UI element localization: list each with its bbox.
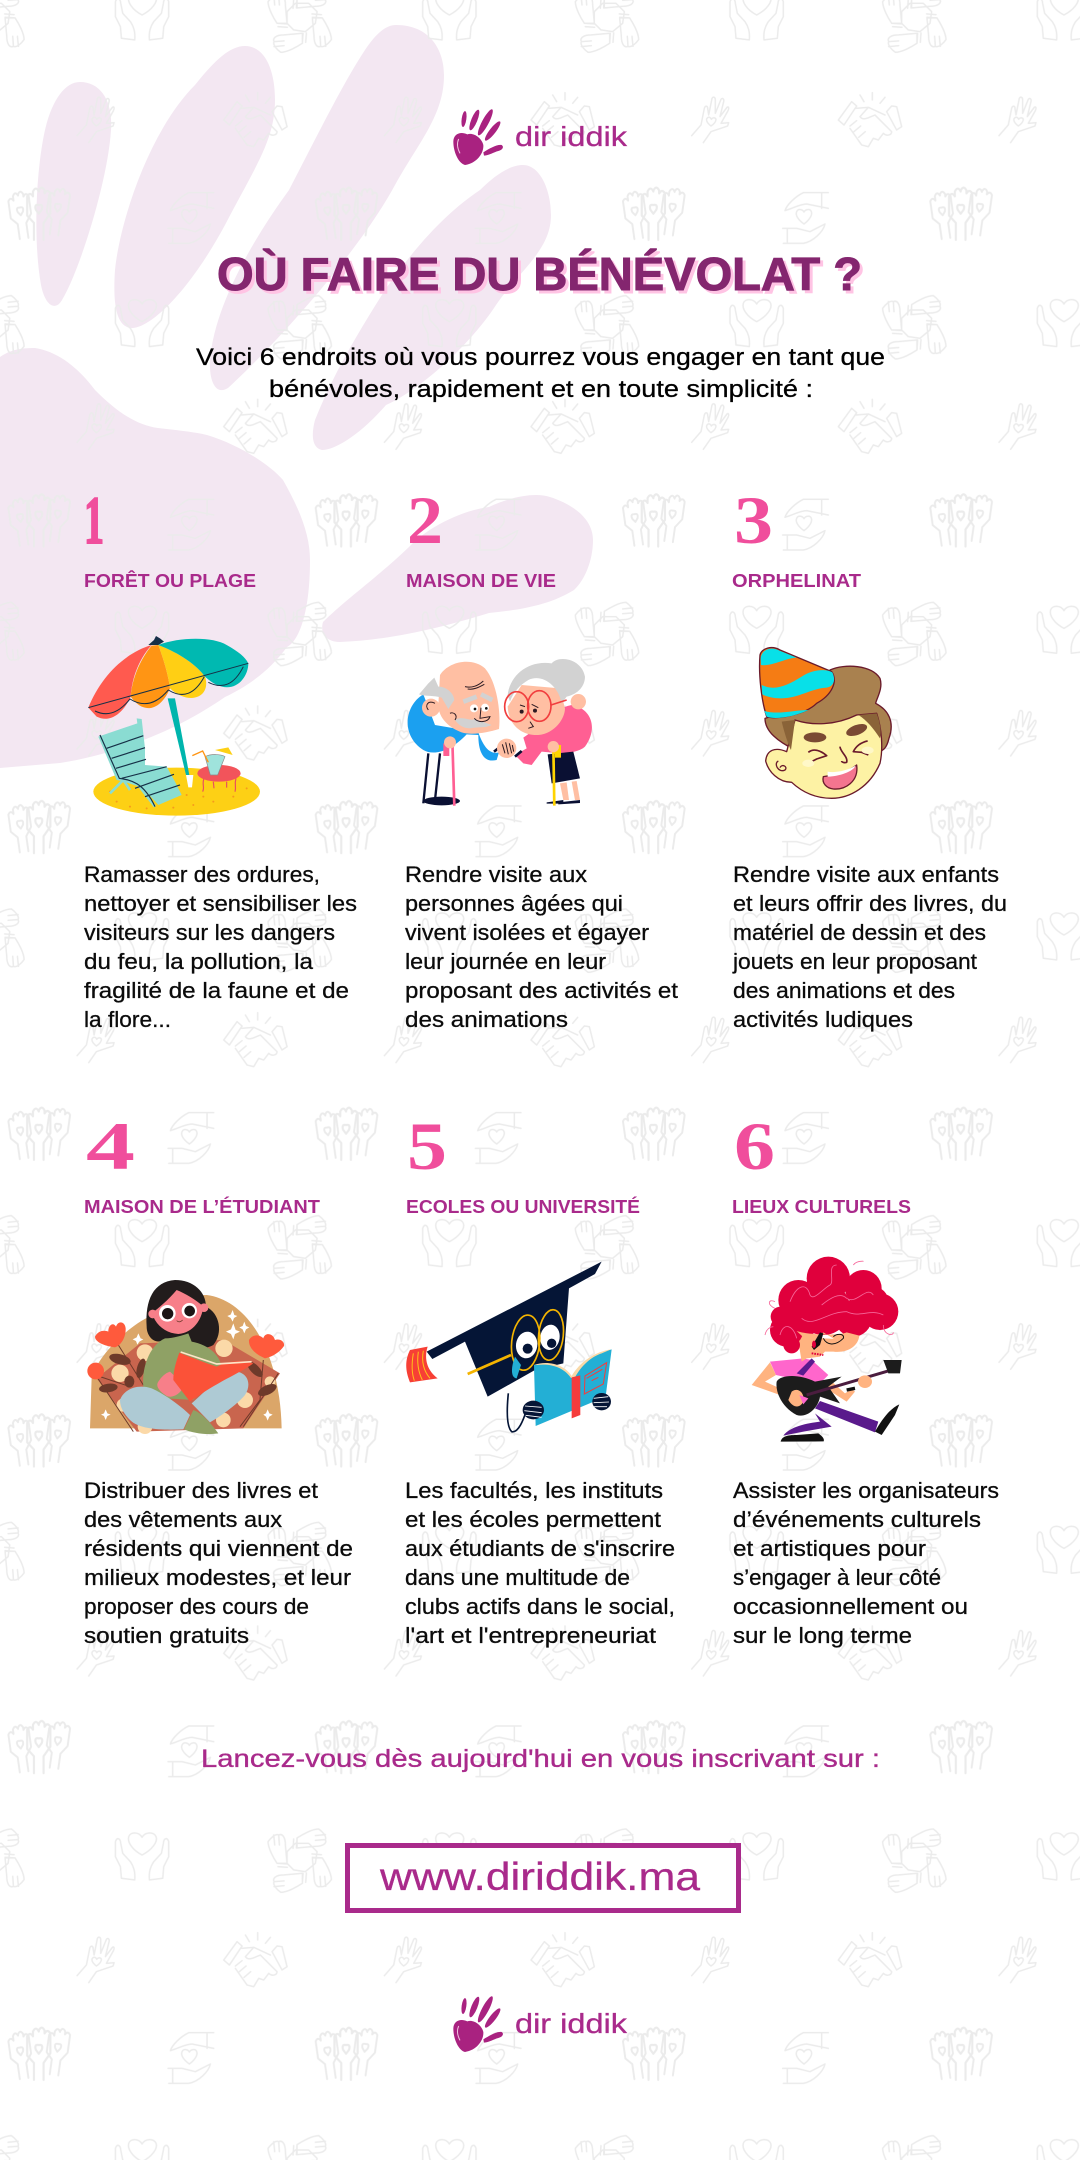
heading 5: ECOLES OU UNIVERSITÉ [406,1196,640,1217]
description 6: occasionnellement ou [733,1594,968,1619]
icon: boy with party hat [760,648,891,798]
bottom logo mark [453,1995,503,2052]
description 2 [405,862,678,1032]
description 4 [84,1478,353,1648]
heading 1: FORÊT OU PLAGE [84,570,256,591]
description 6: d’événements culturels [733,1507,981,1532]
panel: 3 orphelinat [732,482,1007,1032]
intro paragraph: Voici 6 endroits où vous pourrez vous engager en tant que [196,344,885,371]
heading 3: ORPHELINAT [732,571,861,591]
description 1: la flore... [84,1007,171,1032]
description 2: proposant des activités et [405,978,678,1003]
bottom logo wordmark: dir iddik [515,2008,628,2039]
description 1: fragilité de la faune et de [84,978,349,1003]
description 3 [732,862,1007,1032]
description 3: jouets en leur proposant [732,949,977,974]
heading 4: MAISON DE L’ÉTUDIANT [84,1196,320,1217]
description 6: s’engager à leur côté [733,1565,941,1590]
description 5 [405,1478,675,1648]
description 4: proposer des cours de [84,1594,309,1619]
panel: 2 maison de vie [405,482,678,1032]
description 1: nettoyer et sensibiliser les [84,891,357,916]
icon: graduation cap reading a book [406,1262,612,1432]
logo mark: hand with heart [453,108,503,165]
panel: 1 forêt ou plage [84,482,357,1032]
number 5: 5 [407,1108,447,1184]
description 5: aux étudiants de s'inscrire [405,1536,675,1561]
description 1 [84,862,357,1032]
description 3: activités ludiques [733,1007,913,1032]
description 4: soutien gratuits [84,1623,249,1648]
icon: elderly couple [408,659,592,806]
description 6 [733,1478,999,1648]
description 3: et leurs offrir des livres, du [733,891,1007,916]
website button: www.diriddik.ma [379,1856,700,1899]
description 2: Rendre visite aux [405,862,587,887]
intro paragraph: bénévoles, rapidement et en toute simplicité : [269,376,813,403]
description 6: Assister les organisateurs [733,1478,999,1503]
description 3: Rendre visite aux enfants [733,862,999,887]
description 5: clubs actifs dans le social, [405,1594,675,1619]
call to action text: Lancez-vous dès aujourd'hui en vous inscrivant sur : [201,1745,880,1773]
description 1: Ramasser des ordures, [84,862,320,887]
description 6: sur le long terme [733,1623,912,1648]
number 6: 6 [734,1108,775,1184]
description 5: l'art et l'entrepreneuriat [405,1623,656,1648]
description 4: résidents qui viennent de [84,1536,353,1561]
large pale hand silhouette [0,25,593,768]
description 1: du feu, la pollution, la [84,949,314,974]
heading 2: MAISON DE VIE [406,571,556,591]
number 2: 2 [407,482,443,558]
description 2: vivent isolées et égayer [405,920,649,945]
icon: guitarist with red curly hair [752,1257,902,1442]
logo wordmark: dir iddik [515,121,628,152]
panel: 4 maison de l'étudiant [84,1108,353,1648]
description 3: des animations et des [733,978,955,1003]
description 2: personnes âgées qui [405,891,623,916]
number 3: 3 [734,482,773,558]
title: OÙ FAIRE DU BÉNÉVOLAT ? [217,248,862,300]
description 4: des vêtements aux [84,1507,282,1532]
description 3: matériel de dessin et des [733,920,986,945]
bottom logo [453,1995,628,2052]
intro paragraph [196,344,885,403]
description 4: milieux modestes, et leur [84,1565,351,1590]
description 5: Les facultés, les instituts [405,1478,663,1503]
number 1: 1 [84,482,104,558]
heading 6: LIEUX CULTURELS [732,1197,911,1217]
description 2: des animations [405,1007,568,1032]
description 1: visiteurs sur les dangers [84,920,335,945]
description 6: et artistiques pour [733,1536,926,1561]
description 4: Distribuer des livres et [84,1478,318,1503]
icon: beach umbrella and chair [88,636,260,816]
panel: 6 lieux culturels [732,1108,999,1648]
description 5: dans une multitude de [405,1565,630,1590]
icon: girl reading a book [87,1280,284,1434]
description 5: et les écoles permettent [405,1507,661,1532]
panel: 5 écoles ou université [405,1108,675,1648]
website button [348,1846,738,1910]
top logo [453,108,628,165]
number 4: 4 [86,1108,135,1184]
description 2: leur journée en leur [405,949,606,974]
